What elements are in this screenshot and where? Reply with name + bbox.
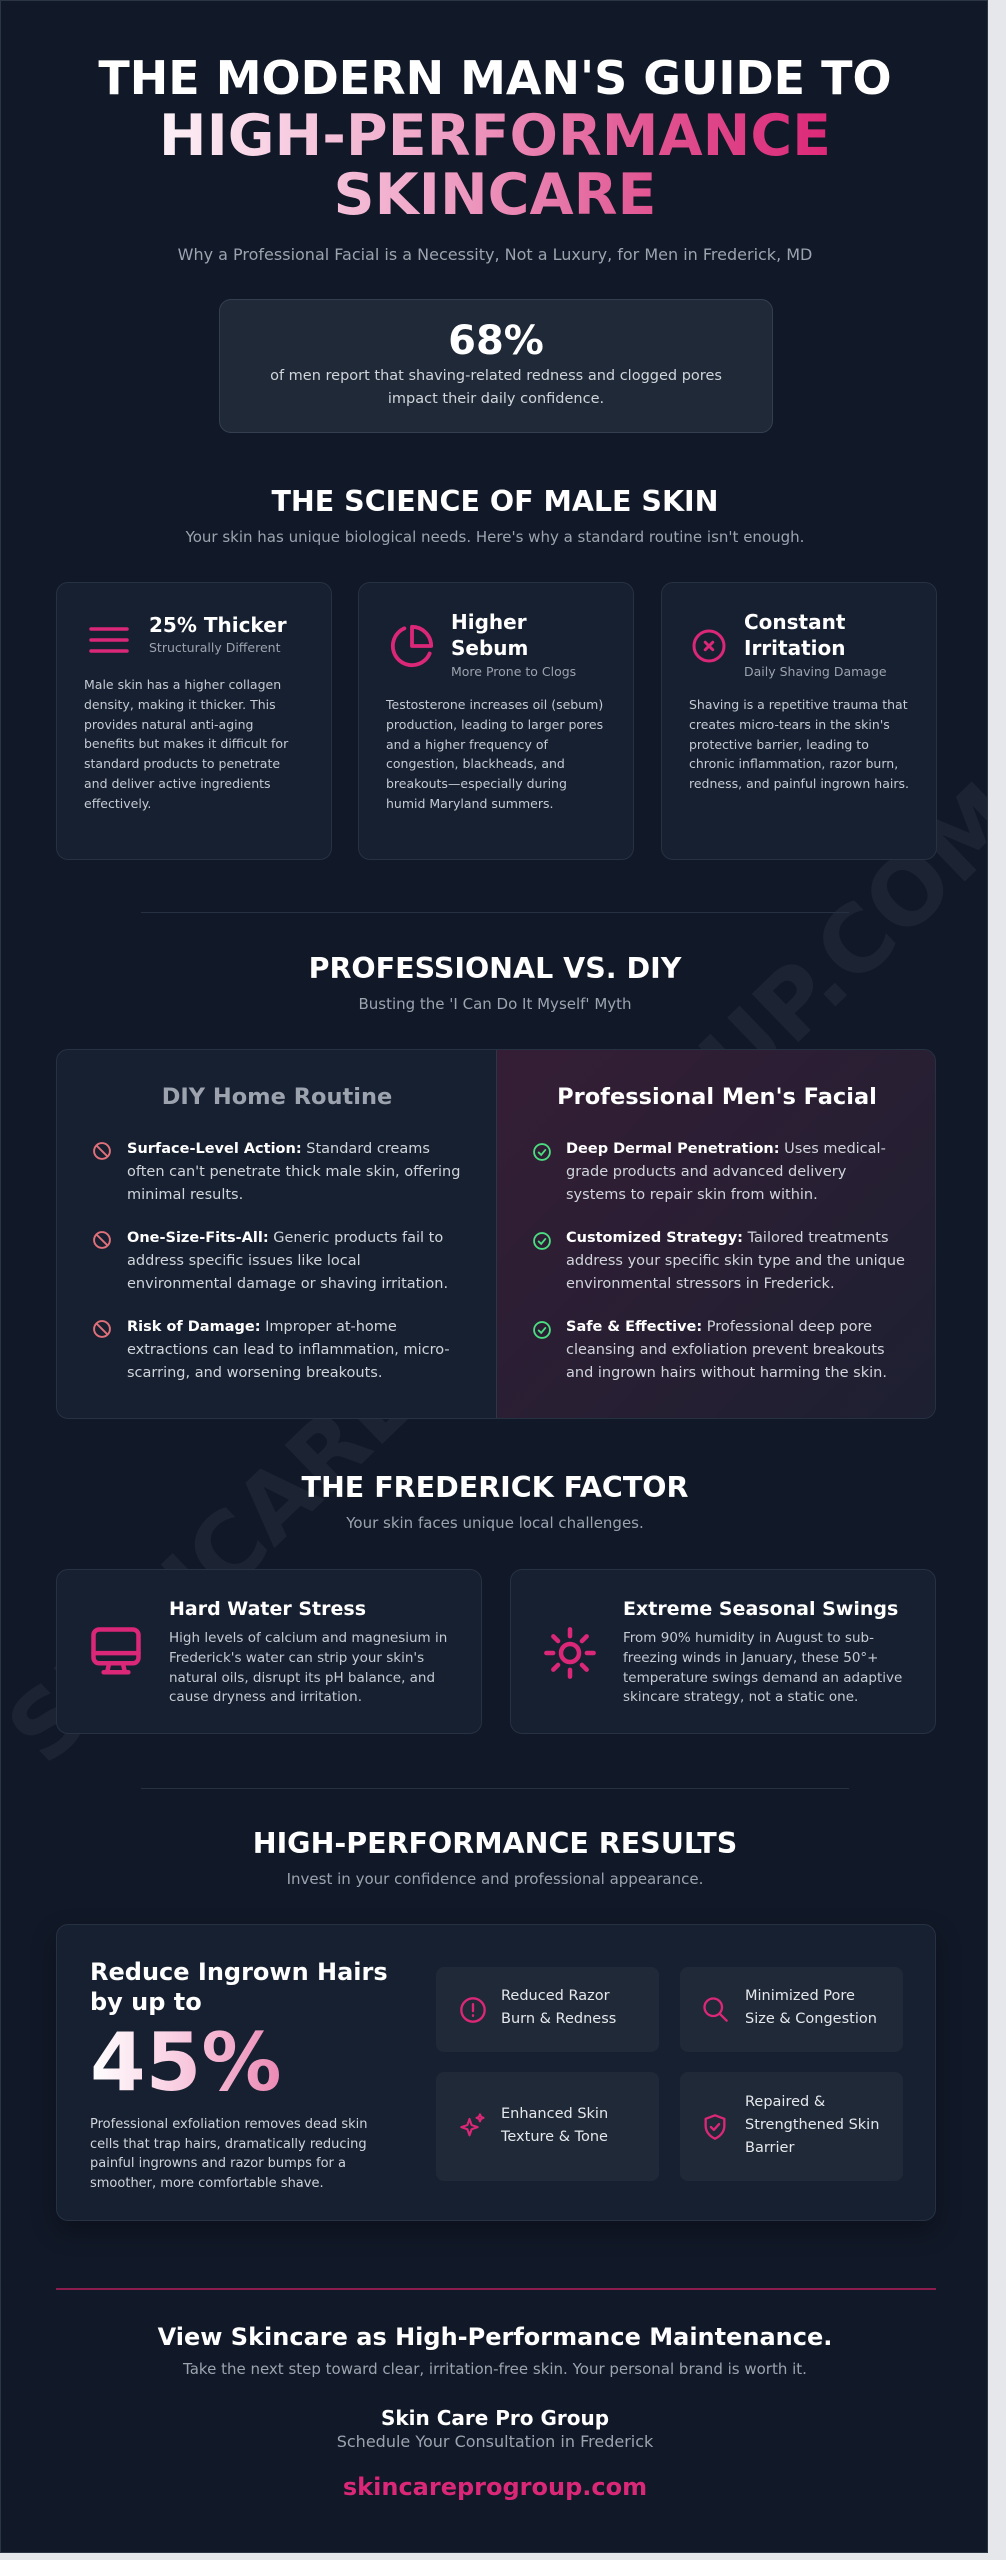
card: constant irritation: Daily Shaving Damage <box>744 664 887 679</box>
tile: razor burn <box>436 1967 659 2052</box>
card: hard water <box>56 1569 482 1734</box>
stat: 45% <box>90 1958 388 2191</box>
card: higher sebum: Higher <box>451 610 527 634</box>
text: Your skin has unique biological needs. Here's why a standard routine isn't enough. <box>186 528 804 546</box>
diy items <box>93 1141 460 1381</box>
tile: pores: Size & Congestion <box>745 2011 877 2027</box>
panel: DIY: Surface-Level Action: Standard creams often can't penetrate thick male skin, offering minimal results. <box>127 1141 460 1203</box>
tile: barrier: Strengthened Skin <box>745 2117 879 2133</box>
card: 25% thicker: Structurally Different <box>149 640 280 655</box>
stat box: 68%: impact their daily confidence. <box>388 391 604 407</box>
panel: comparison <box>56 1049 936 1419</box>
title: THE MODERN MAN'S GUIDE TO <box>98 51 892 105</box>
stat: 45%: 45% <box>90 2016 281 2109</box>
panel: DIY: Risk of Damage: Improper at-home extractions can lead to inflammation, micro-scarring, and worsening breakouts. <box>127 1319 450 1381</box>
card: constant irritation: Constant <box>744 610 845 634</box>
card: hard water: High levels of calcium and magnesium in Frederick's water can strip your skin's natural oils, disrupt its pH balance, and cause dryness and irritation. <box>169 1630 447 1705</box>
title <box>98 51 892 228</box>
title: SKINCARE <box>334 162 656 228</box>
stat box: 68%: 68% <box>448 318 544 364</box>
card: seasonal swings: Extreme Seasonal Swings <box>623 1598 898 1620</box>
card: higher sebum <box>358 582 634 860</box>
panel: DIY: One-Size-Fits-All: Generic products fail to address specific issues like local environmental damage or shaving irritation. <box>127 1230 448 1292</box>
card: constant irritation: Shaving is a repetitive trauma that creates micro-tears in the skin's protective barrier, leading to chronic inflammation, razor burn, redness, and painful ingrown hairs. <box>689 697 909 791</box>
footer cta: Take the next step toward clear, irritation-free skin. Your personal brand is worth it. <box>183 2360 807 2378</box>
subtitle: Why a Professional Facial is a Necessity, Not a Luxury, for Men in Frederick, MD <box>178 245 812 264</box>
stat box: 68% <box>219 299 773 433</box>
icon: sun <box>544 1627 596 1679</box>
card: higher sebum: Sebum <box>451 636 528 660</box>
tile: barrier <box>680 2072 903 2181</box>
card: constant irritation: Irritation <box>744 636 845 660</box>
card: constant irritation <box>661 582 937 860</box>
panel: professional <box>497 1050 937 1420</box>
footer cta <box>158 2323 832 2501</box>
panel: professional: Professional Men's Facial <box>557 1084 877 1110</box>
footer cta: skincareprogroup.com <box>343 2473 647 2501</box>
card: 25% thicker: Male skin has a higher collagen density, making it thicker. This provides natural anti-aging benefits but makes it difficult for standard products to penetrate and deliver active ingredients effectively. <box>84 677 288 811</box>
title: HIGH-PERFORMANCE <box>159 103 831 169</box>
heading: professional vs diy: PROFESSIONAL VS. DIY <box>309 952 681 985</box>
card: higher sebum: More Prone to Clogs <box>451 664 576 679</box>
card: 25% thicker <box>56 582 332 860</box>
icon: lines <box>89 627 129 653</box>
card: higher sebum: Testosterone increases oil (sebum) production, leading to larger pores and a higher frequency of congestion, blackheads, and breakouts—especially during humid Maryland summers. <box>386 697 603 811</box>
footer cta: View Skincare as High-Performance Maintenance. <box>158 2323 832 2351</box>
stat: 45%: Professional exfoliation removes dead skin cells that trap hairs, dramatically reducing painful ingrowns and razor bumps for a smoother, more comfortable shave. <box>90 2117 368 2191</box>
tile: pores: Minimized Pore <box>745 1988 855 2004</box>
icon: monitor <box>91 1627 141 1674</box>
tile: pores <box>680 1967 903 2052</box>
card: 25% thicker: 25% Thicker <box>149 613 287 637</box>
tile: texture <box>436 2072 659 2181</box>
icon: x circle <box>692 630 726 662</box>
tile: razor burn: Reduced Razor <box>501 1988 610 2004</box>
card: seasonal swings <box>510 1569 936 1734</box>
text: Your skin faces unique local challenges. <box>346 1514 644 1532</box>
text: Invest in your confidence and professional appearance. <box>287 1870 703 1888</box>
panel: DIY: DIY Home Routine <box>162 1084 392 1110</box>
icon: pie chart <box>390 624 434 668</box>
pro items <box>533 1141 905 1381</box>
tile: razor burn: Burn & Redness <box>501 2011 616 2027</box>
footer cta: Schedule Your Consultation in Frederick <box>337 2432 653 2451</box>
tile: barrier: Repaired & <box>745 2094 825 2110</box>
panel: professional: Deep Dermal Penetration: Uses medical-grade products and advanced delivery systems to repair skin from within. <box>566 1141 886 1203</box>
tile: texture: Texture & Tone <box>501 2129 608 2145</box>
panel: professional: Safe & Effective: Professional deep pore cleansing and exfoliation prevent breakouts and ingrown hairs without harming the skin. <box>566 1319 887 1381</box>
stat box: 68%: of men report that shaving-related redness and clogged pores <box>270 368 722 384</box>
card: hard water: Hard Water Stress <box>169 1598 366 1620</box>
panel: results <box>56 1924 936 2221</box>
panel: DIY <box>57 1050 497 1420</box>
panel: professional: Customized Strategy: Tailored treatments address your specific skin type and the unique environmental stressors in Frederick. <box>566 1230 905 1292</box>
heading: science: THE SCIENCE OF MALE SKIN <box>271 485 718 518</box>
card: seasonal swings: From 90% humidity in August to sub-freezing winds in January, these 50°+ temperature swings demand an adaptive skincare strategy, not a static one. <box>623 1630 902 1705</box>
stat: 45%: by up to <box>90 1988 202 2016</box>
tile: texture: Enhanced Skin <box>501 2106 608 2122</box>
stat: 45%: Reduce Ingrown Hairs <box>90 1958 388 1986</box>
tile: barrier: Barrier <box>745 2140 794 2156</box>
heading: results: HIGH-PERFORMANCE RESULTS <box>253 1827 737 1860</box>
footer cta: Skin Care Pro Group <box>381 2406 609 2430</box>
heading: frederick factor: THE FREDERICK FACTOR <box>302 1471 688 1504</box>
text: Busting the 'I Can Do It Myself' Myth <box>358 995 632 1013</box>
